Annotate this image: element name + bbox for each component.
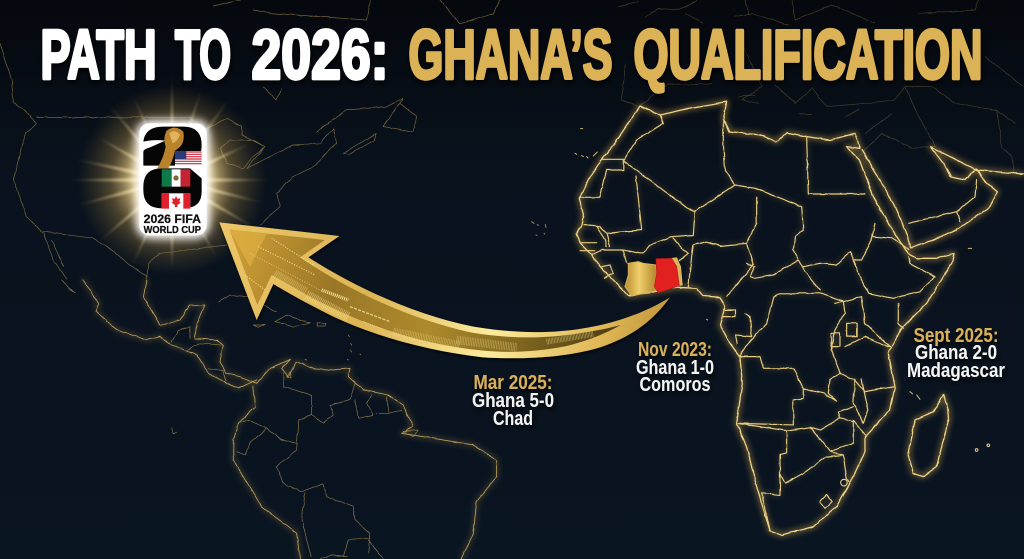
label: Sept 2025 match: Ghana 2-0 xyxy=(915,342,997,364)
Americas country borders xyxy=(62,280,418,559)
logo: 2026 FIFA World Cup xyxy=(136,120,210,239)
label: Nov 2023 match: Nov 2023: xyxy=(638,339,712,361)
logo glow: sunburst xyxy=(62,70,272,275)
Americas coast glow xyxy=(83,280,497,559)
arrow inner panel xyxy=(229,229,621,352)
label: Sept 2025 match: Sept 2025: xyxy=(914,325,998,347)
map: Azores islands xyxy=(532,222,546,235)
arrow circuit texture xyxy=(245,238,593,347)
title xyxy=(40,16,982,94)
label: Mar 2025 match: Ghana 5-0 xyxy=(472,390,554,412)
arrow highlight at tip xyxy=(229,229,267,267)
Canary Islands xyxy=(575,129,972,399)
title: gold part: GHANA’S xyxy=(408,16,612,94)
logo wordmark xyxy=(144,212,201,236)
logo wordmark: WORLD CUP xyxy=(144,225,201,236)
arrow: gold curved from Ghana to World Cup xyxy=(219,222,670,358)
map: Africa and Arabia glowing borders xyxy=(575,102,1023,535)
Africa coastline xyxy=(577,102,954,535)
African country borders xyxy=(579,115,977,530)
logo wordmark: 2026 FIFA xyxy=(144,212,201,226)
map: North America outline xyxy=(0,0,500,279)
title: white part xyxy=(40,16,388,94)
label: Sept 2025 match: Madagascar xyxy=(907,360,1005,382)
Arabia coastline xyxy=(862,147,1023,248)
label: Nov 2023 match: Comoros xyxy=(640,374,710,396)
flag: USA xyxy=(175,151,202,166)
title: white part: TO xyxy=(175,16,231,94)
arrow body xyxy=(219,222,670,358)
map: faint Europe and Middle East outlines xyxy=(619,0,1024,173)
small islands xyxy=(841,479,847,486)
logo numeral 6 xyxy=(143,168,202,208)
logo numeral 2 xyxy=(143,127,202,166)
label: Mar 2025 match: Chad xyxy=(493,408,533,430)
label: Nov 2023 match xyxy=(636,339,714,396)
Togo highlighted gold xyxy=(672,258,682,286)
glow around the Africa coast xyxy=(577,102,1023,535)
label: Mar 2025 match xyxy=(472,372,554,430)
Madagascar xyxy=(908,395,949,477)
Americas coastline xyxy=(83,280,497,559)
Africa lines xyxy=(577,102,1023,535)
Ghana highlighted red xyxy=(654,258,679,293)
logo white plate xyxy=(136,120,210,239)
label: Sept 2025 match xyxy=(907,325,1005,382)
Lesser Antilles islands xyxy=(305,335,361,360)
label: Mar 2025 match: Mar 2025: xyxy=(474,372,552,394)
title: white part: 2026: xyxy=(252,16,388,94)
Ivory Coast highlighted gold xyxy=(625,262,657,296)
map: Central and South America outline xyxy=(62,280,497,559)
label: Nov 2023 match: Ghana 1-0 xyxy=(636,357,714,379)
title: gold part xyxy=(408,16,982,94)
logo trophy xyxy=(157,128,184,168)
flag: Canada xyxy=(162,193,190,209)
title: white part: PATH xyxy=(40,16,156,94)
flag: Mexico xyxy=(162,169,190,187)
